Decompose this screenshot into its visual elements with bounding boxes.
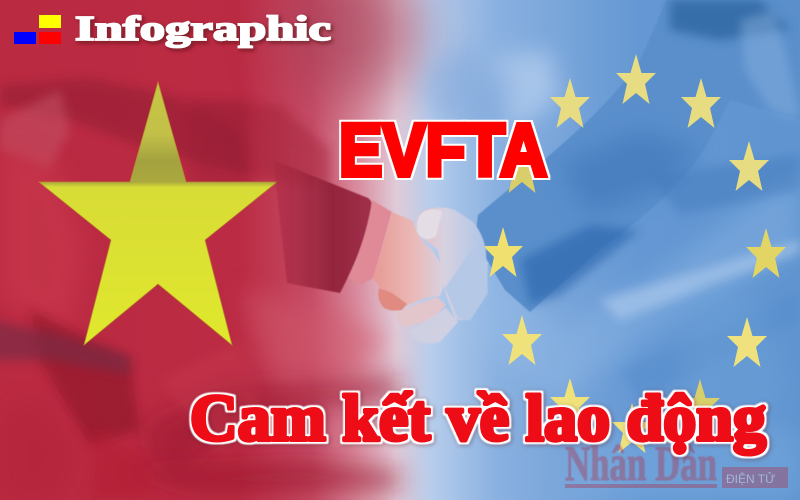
panel: Vietnamese flag side textures [0, 0, 420, 500]
icon: twelve EU stars [483, 54, 786, 453]
watermark: Nhân Dân Điện Tử: ĐIỆN TỬ [726, 471, 775, 486]
label: Infographic logo [14, 9, 331, 48]
panel: EU flag side folds [425, 50, 800, 500]
heading: Infographic: Infographic [75, 9, 331, 48]
panel: dark blue sleeve [475, 0, 800, 312]
illustration: handshake between two sleeves [273, 160, 488, 344]
icon: coloured squares [14, 15, 61, 44]
watermark: Nhân Dân Điện Tử: Nhân Dân [565, 435, 717, 491]
heading: Cam kết về lao động: Cam kết về lao động [190, 382, 766, 455]
icon: yellow star of the Vietnamese flag [39, 82, 277, 345]
heading: EVFTA: EVFTA [339, 108, 547, 192]
